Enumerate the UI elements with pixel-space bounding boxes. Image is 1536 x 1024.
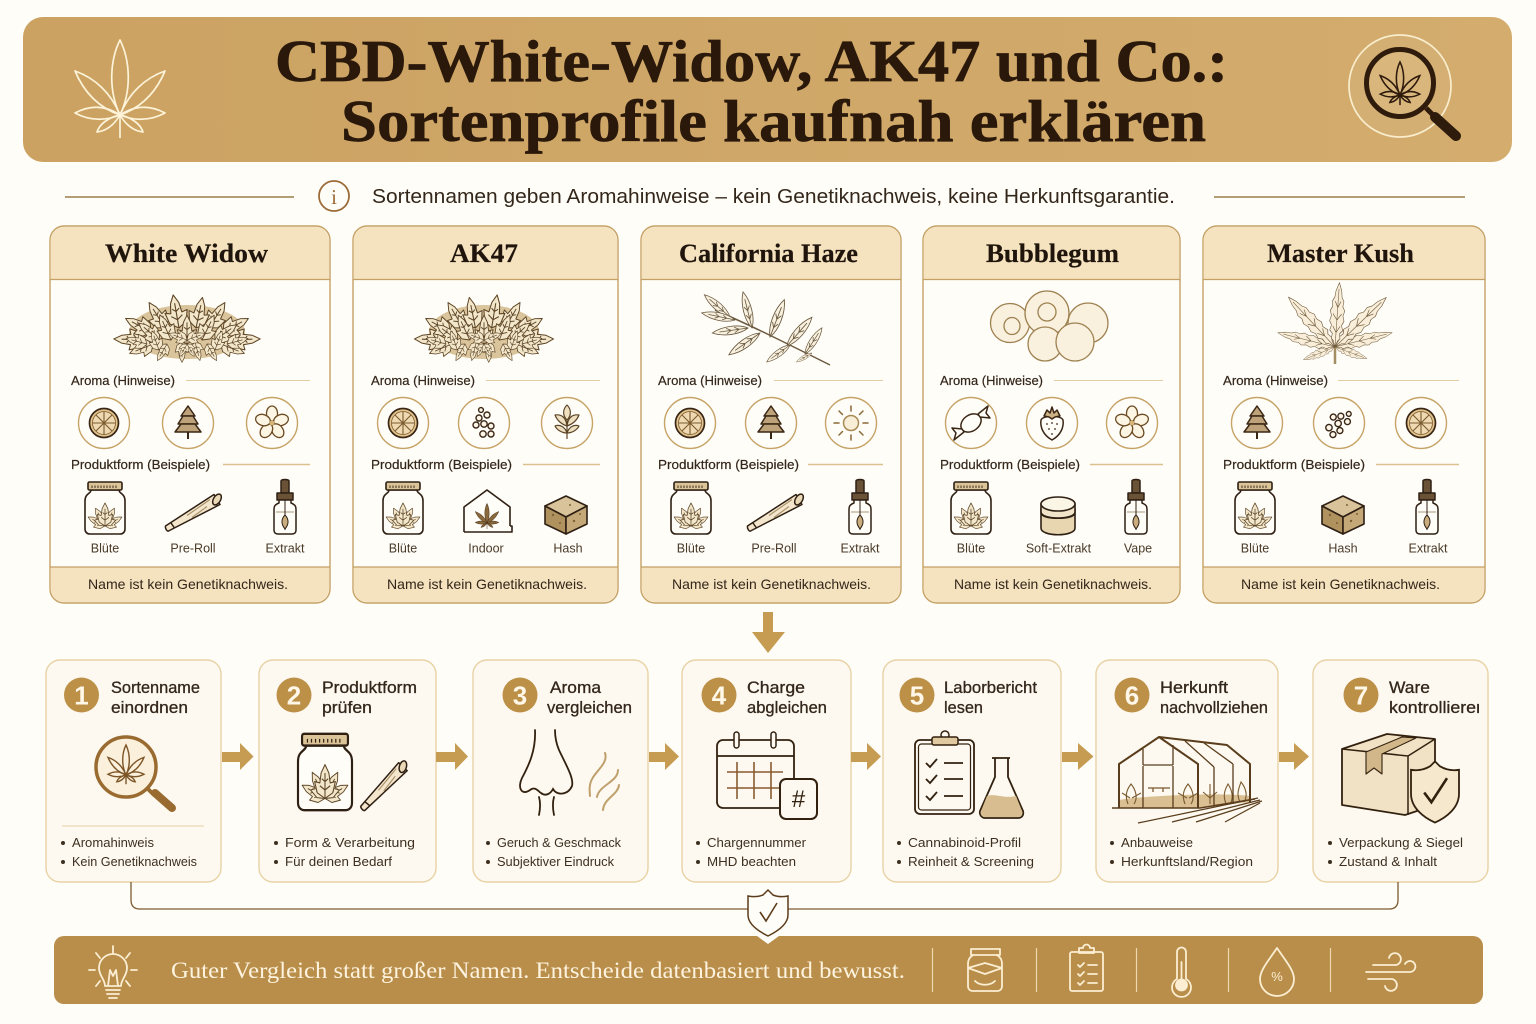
step 7 bullets xyxy=(1328,835,1463,869)
step 6 bullets: Herkunftsland/Region xyxy=(1121,854,1253,869)
footer note: Name ist kein Genetiknachweis. xyxy=(672,576,871,592)
aroma section: Aroma (Hinweise) xyxy=(371,373,475,388)
step 3 bullets xyxy=(486,835,621,869)
footer note: Name ist kein Genetiknachweis. xyxy=(1241,576,1440,592)
step 4 bullets: MHD beachten xyxy=(707,854,796,869)
message: Guter Vergleich statt großer Namen. Entscheide datenbasiert und bewusst. xyxy=(171,958,905,983)
aroma section: Aroma (Hinweise) xyxy=(1223,373,1328,388)
product forms xyxy=(71,457,310,556)
arrow xyxy=(1062,743,1094,770)
product forms: Extrakt xyxy=(841,542,880,556)
step 2 xyxy=(259,660,436,882)
step 5 title: lesen xyxy=(944,699,983,717)
arrow xyxy=(1279,743,1309,770)
heading: Bubblegum xyxy=(986,239,1119,268)
panel: White Widow xyxy=(50,226,330,603)
icon: calendar with number xyxy=(717,732,817,819)
step 3 title: vergleichen xyxy=(547,699,632,717)
step 3: 3 xyxy=(513,680,527,710)
step 2 bullets: Für deinen Bedarf xyxy=(285,854,392,869)
step 6 title xyxy=(1160,679,1268,717)
icon: thermometer xyxy=(1172,948,1191,997)
step 6: 6 xyxy=(1125,680,1139,710)
icon: light bulb xyxy=(89,946,137,998)
icon: wind xyxy=(1366,953,1415,991)
icon: nose and scent xyxy=(520,730,619,815)
product forms: Produktform (Beispiele) xyxy=(1223,457,1365,472)
product forms: Produktform (Beispiele) xyxy=(371,457,512,472)
product forms: Extrakt xyxy=(1409,542,1448,556)
step 4 title: Charge xyxy=(747,679,805,697)
step 7: 7 xyxy=(1354,680,1368,710)
product forms: Blüte xyxy=(677,542,705,556)
info text: Sortennamen geben Aromahinweise – kein Genetiknachweis, keine Herkunftsgarantie. xyxy=(372,185,1175,208)
step 1: 1 xyxy=(74,680,89,710)
step 5 bullets: Cannabinoid-Profil xyxy=(908,835,1021,850)
product forms: Produktform (Beispiele) xyxy=(658,457,799,472)
step 2 bullets: Form & Verarbeitung xyxy=(285,835,415,850)
title: Sortenprofile kaufnah erklären xyxy=(341,88,1206,154)
product forms: Blüte xyxy=(957,542,985,556)
step 3 bullets: Subjektiver Eindruck xyxy=(497,854,614,869)
step 7 title: kontrollieren xyxy=(1389,699,1486,717)
connector bracket xyxy=(131,882,1398,909)
step 4 bullets xyxy=(696,835,807,869)
aroma section xyxy=(371,373,600,448)
bottom banner xyxy=(54,890,1483,1004)
panel: Master Kush xyxy=(1203,226,1485,603)
panel: Bubblegum xyxy=(923,226,1180,603)
step 2: 2 xyxy=(287,680,301,710)
step 1 title: einordnen xyxy=(111,699,188,717)
step 4 bullets: Chargennummer xyxy=(707,835,807,850)
step 2 title: prüfen xyxy=(322,699,372,717)
title xyxy=(275,28,1228,154)
step 7 bullets: Verpackung & Siegel xyxy=(1339,835,1463,850)
step 4: 4 xyxy=(712,680,727,710)
product forms: Pre-Roll xyxy=(170,542,216,556)
product forms: Hash xyxy=(553,542,583,556)
step 5 bullets: Reinheit & Screening xyxy=(908,854,1034,869)
icon: clipboard xyxy=(1070,944,1103,991)
icon: magnifier with leaf xyxy=(1349,35,1456,137)
heading: AK47 xyxy=(450,239,518,268)
step 7 title xyxy=(1388,681,1479,714)
aroma section xyxy=(71,373,310,448)
step 5 title: Laborbericht xyxy=(944,679,1037,697)
title: CBD-White-Widow, AK47 und Co.: xyxy=(275,28,1228,94)
step 1 xyxy=(46,660,221,882)
step 3 xyxy=(473,660,648,882)
step 6 title: nachvollziehen xyxy=(1160,699,1268,717)
arrow xyxy=(222,743,254,770)
title banner xyxy=(23,17,1512,162)
panel: California Haze xyxy=(641,226,901,603)
arrow xyxy=(851,743,881,770)
icon: greenhouse xyxy=(1112,737,1262,823)
icon: magnifier xyxy=(96,737,172,808)
step 7 xyxy=(1313,660,1488,882)
product forms xyxy=(658,457,883,556)
step 4 title xyxy=(747,679,827,717)
illustration: bubbles xyxy=(990,291,1108,361)
product forms: Blüte xyxy=(91,542,119,556)
step 2 title: Produktform xyxy=(322,679,417,697)
product forms: Produktform (Beispiele) xyxy=(71,457,210,472)
aroma section: Aroma (Hinweise) xyxy=(940,373,1043,388)
icon: humidity drop xyxy=(1260,948,1294,996)
step 3 bullets: Geruch & Geschmack xyxy=(497,835,621,850)
step 6 xyxy=(1096,660,1278,882)
heading: Master Kush xyxy=(1267,239,1415,268)
arrow xyxy=(649,743,679,770)
panel: AK47 xyxy=(353,226,618,603)
icon: cannabis leaf xyxy=(75,40,165,138)
step 1 title: Sortenname xyxy=(111,679,200,697)
product forms xyxy=(940,457,1163,556)
aroma section: Aroma (Hinweise) xyxy=(658,373,762,388)
product forms: Blüte xyxy=(1241,542,1269,556)
product forms: Hash xyxy=(1328,542,1358,556)
step 6 bullets: Anbauweise xyxy=(1121,835,1193,850)
step 1 bullets: Kein Genetiknachweis xyxy=(72,854,197,869)
icon: jar and pre-roll xyxy=(298,734,418,811)
step 6 title: Herkunft xyxy=(1160,679,1228,697)
aroma section xyxy=(1223,373,1459,448)
product forms: Vape xyxy=(1124,542,1152,556)
product forms xyxy=(1223,457,1459,556)
illustration: bud xyxy=(414,293,554,364)
aroma section: Aroma (Hinweise) xyxy=(71,373,175,388)
product forms: Produktform (Beispiele) xyxy=(940,457,1080,472)
heading: California Haze xyxy=(679,239,858,268)
step 4 xyxy=(682,660,851,882)
step 4 title: abgleichen xyxy=(747,699,827,717)
humidity sign: % xyxy=(1271,969,1283,984)
info line xyxy=(65,181,1465,211)
step 6 bullets xyxy=(1110,835,1253,869)
icon: info: i xyxy=(331,185,337,209)
product forms: Soft-Extrakt xyxy=(1026,542,1092,556)
step 1 bullets xyxy=(61,835,197,869)
icon: jar xyxy=(968,949,1002,991)
icon: clipboard and flask xyxy=(915,731,1023,818)
aroma section xyxy=(658,373,883,448)
footer note: Name ist kein Genetiknachweis. xyxy=(387,576,587,592)
step 5 xyxy=(883,660,1061,882)
product forms: Pre-Roll xyxy=(751,542,797,556)
step 2 title xyxy=(322,679,417,717)
step 1 bullets: Aromahinweis xyxy=(72,835,154,850)
footer note: Name ist kein Genetiknachweis. xyxy=(954,576,1152,592)
illustration: branch xyxy=(701,291,830,365)
heading: White Widow xyxy=(105,239,268,268)
step 7 bullets: Zustand & Inhalt xyxy=(1339,854,1437,869)
step 3 title xyxy=(547,679,632,717)
step 1 title xyxy=(111,679,200,717)
icon: calendar with number: # xyxy=(792,786,806,813)
footer note: Name ist kein Genetiknachweis. xyxy=(88,576,288,592)
step 3 title: Aroma xyxy=(550,679,602,697)
step 5 bullets xyxy=(897,835,1034,869)
arrow: down to steps xyxy=(752,612,785,653)
aroma section xyxy=(940,373,1163,448)
product forms: Blüte xyxy=(389,542,417,556)
illustration: leaf xyxy=(1276,282,1394,364)
icon: info xyxy=(319,181,349,211)
step 2 bullets xyxy=(274,835,415,869)
step 5 title xyxy=(944,679,1037,717)
icon: shield check xyxy=(748,890,788,936)
icon: box and shield xyxy=(1342,734,1459,823)
step 7 title: Ware xyxy=(1389,679,1430,697)
product forms: Extrakt xyxy=(266,542,305,556)
product forms: Indoor xyxy=(468,542,504,556)
product forms xyxy=(371,457,600,556)
step 5: 5 xyxy=(910,680,924,710)
illustration: bud xyxy=(113,293,261,364)
arrow xyxy=(436,743,468,770)
